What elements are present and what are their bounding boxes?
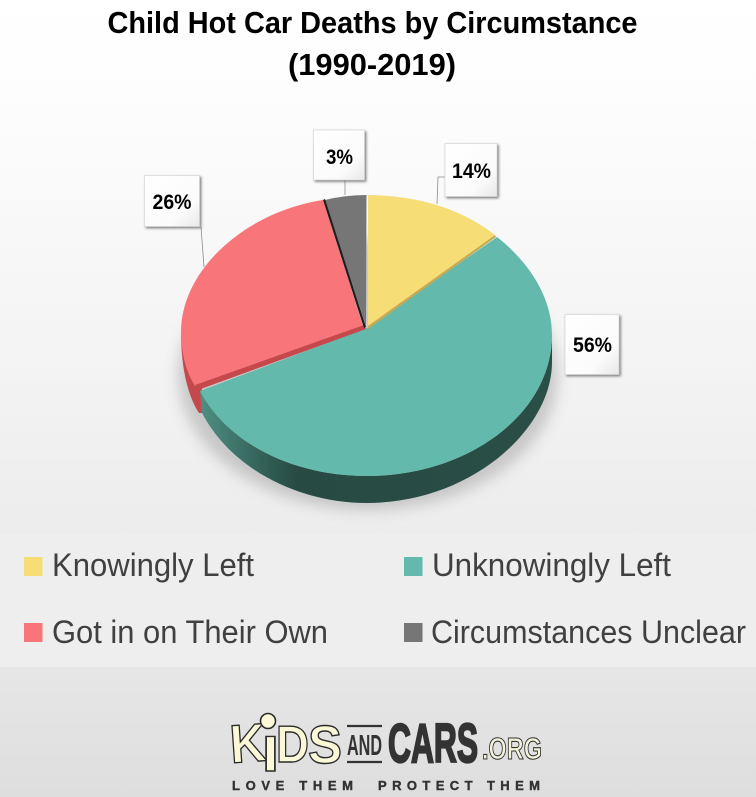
pie shadow bbox=[178, 240, 558, 510]
3D pie chart bbox=[178, 195, 558, 510]
legend panel bbox=[0, 533, 756, 667]
title: (1990-2019) bbox=[288, 47, 456, 82]
label: 56%: 56% bbox=[573, 334, 612, 357]
slice: got in on their own 26% bbox=[181, 200, 363, 386]
logo word: and bbox=[347, 726, 382, 762]
leader lines bbox=[201, 177, 445, 267]
logo tagline: LOVE THEM bbox=[232, 778, 353, 793]
logo word: kids: S bbox=[308, 715, 342, 775]
legend: circumstances unclear: Circumstances Unclear bbox=[431, 614, 746, 650]
logo: Kids and Cars bbox=[228, 712, 542, 793]
logo word: kids: I bbox=[262, 726, 279, 782]
label: 14%: 14% bbox=[452, 160, 491, 183]
label: 3%: 3% bbox=[326, 146, 353, 169]
legend: got in on their own: Got in on Their Own bbox=[52, 614, 328, 650]
logo word: kids bbox=[228, 713, 342, 782]
logo word: kids: D bbox=[276, 716, 309, 774]
legend: unknowingly left: Unknowingly Left bbox=[432, 547, 671, 583]
slice: unknowingly left 56% bbox=[200, 237, 552, 476]
label: 26%: 26% bbox=[152, 191, 192, 214]
label: 3% bbox=[314, 130, 364, 180]
slice: knowingly left 14% bbox=[368, 195, 495, 326]
side wall: got in on their own bbox=[181, 332, 202, 413]
logo tagline bbox=[232, 778, 540, 793]
logo word: and: AND bbox=[347, 730, 382, 762]
legend: knowingly left: Knowingly Left bbox=[52, 547, 254, 583]
slice: circumstances unclear 3% bbox=[325, 195, 366, 326]
title: Child Hot Car Deaths by Circumstance bbox=[108, 5, 638, 40]
label: 26% bbox=[144, 176, 200, 226]
title bbox=[108, 5, 638, 82]
logo word: cars: CARS bbox=[388, 712, 478, 774]
logo word: kids: K bbox=[228, 713, 268, 775]
side wall: unknowingly left bbox=[200, 335, 552, 503]
logo word: .org: .ORG bbox=[482, 731, 542, 766]
label: 14% bbox=[445, 144, 497, 196]
label: 56% bbox=[565, 314, 619, 374]
logo tagline: PROTECT THEM bbox=[378, 778, 540, 793]
